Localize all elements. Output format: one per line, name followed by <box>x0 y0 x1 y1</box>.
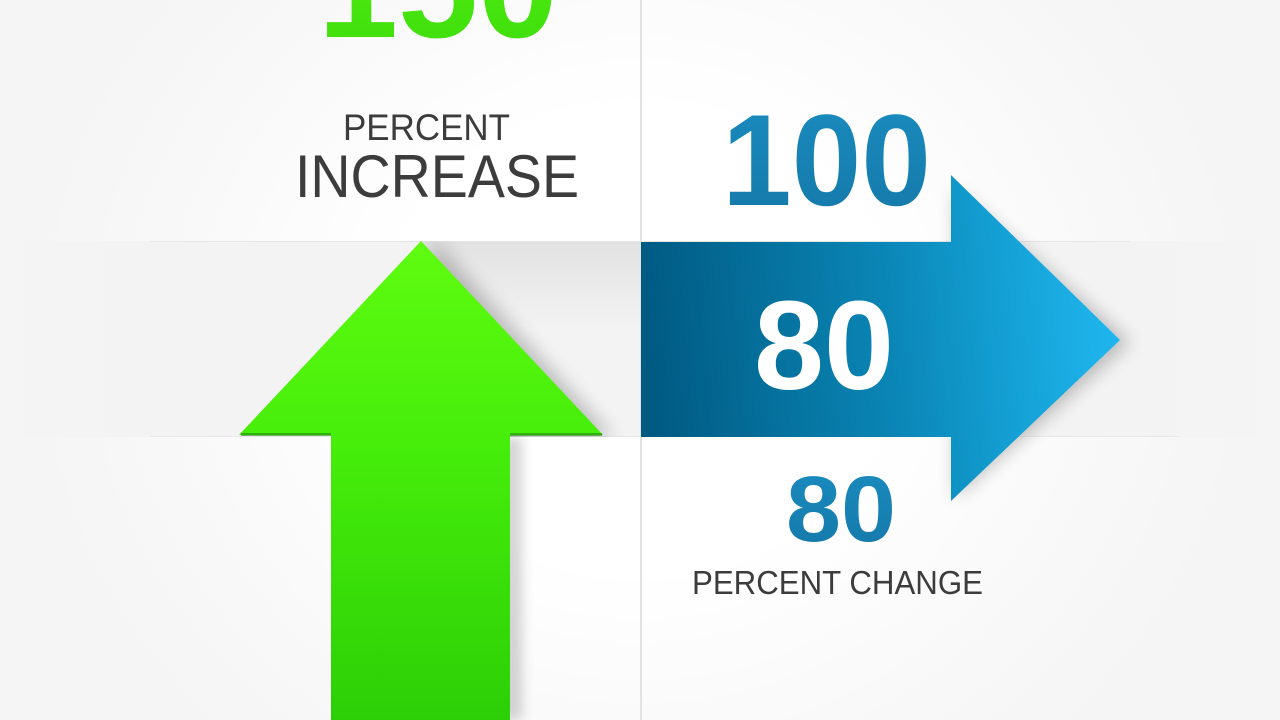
head shadow of green arrow <box>420 238 614 438</box>
label: increase: INCREASE <box>295 143 579 210</box>
blue right arrow <box>641 175 1120 501</box>
number: 80 in arrow: 80 <box>754 275 894 416</box>
green up arrow <box>239 241 603 720</box>
label: percent: PERCENT <box>343 107 510 148</box>
blue arrow shadow <box>955 190 1130 498</box>
number: 80 lower: 80 <box>786 457 896 561</box>
shaft shadow of green arrow <box>502 437 522 720</box>
number: 100: 100 <box>722 87 931 233</box>
label: percent change: PERCENT CHANGE <box>692 564 983 601</box>
